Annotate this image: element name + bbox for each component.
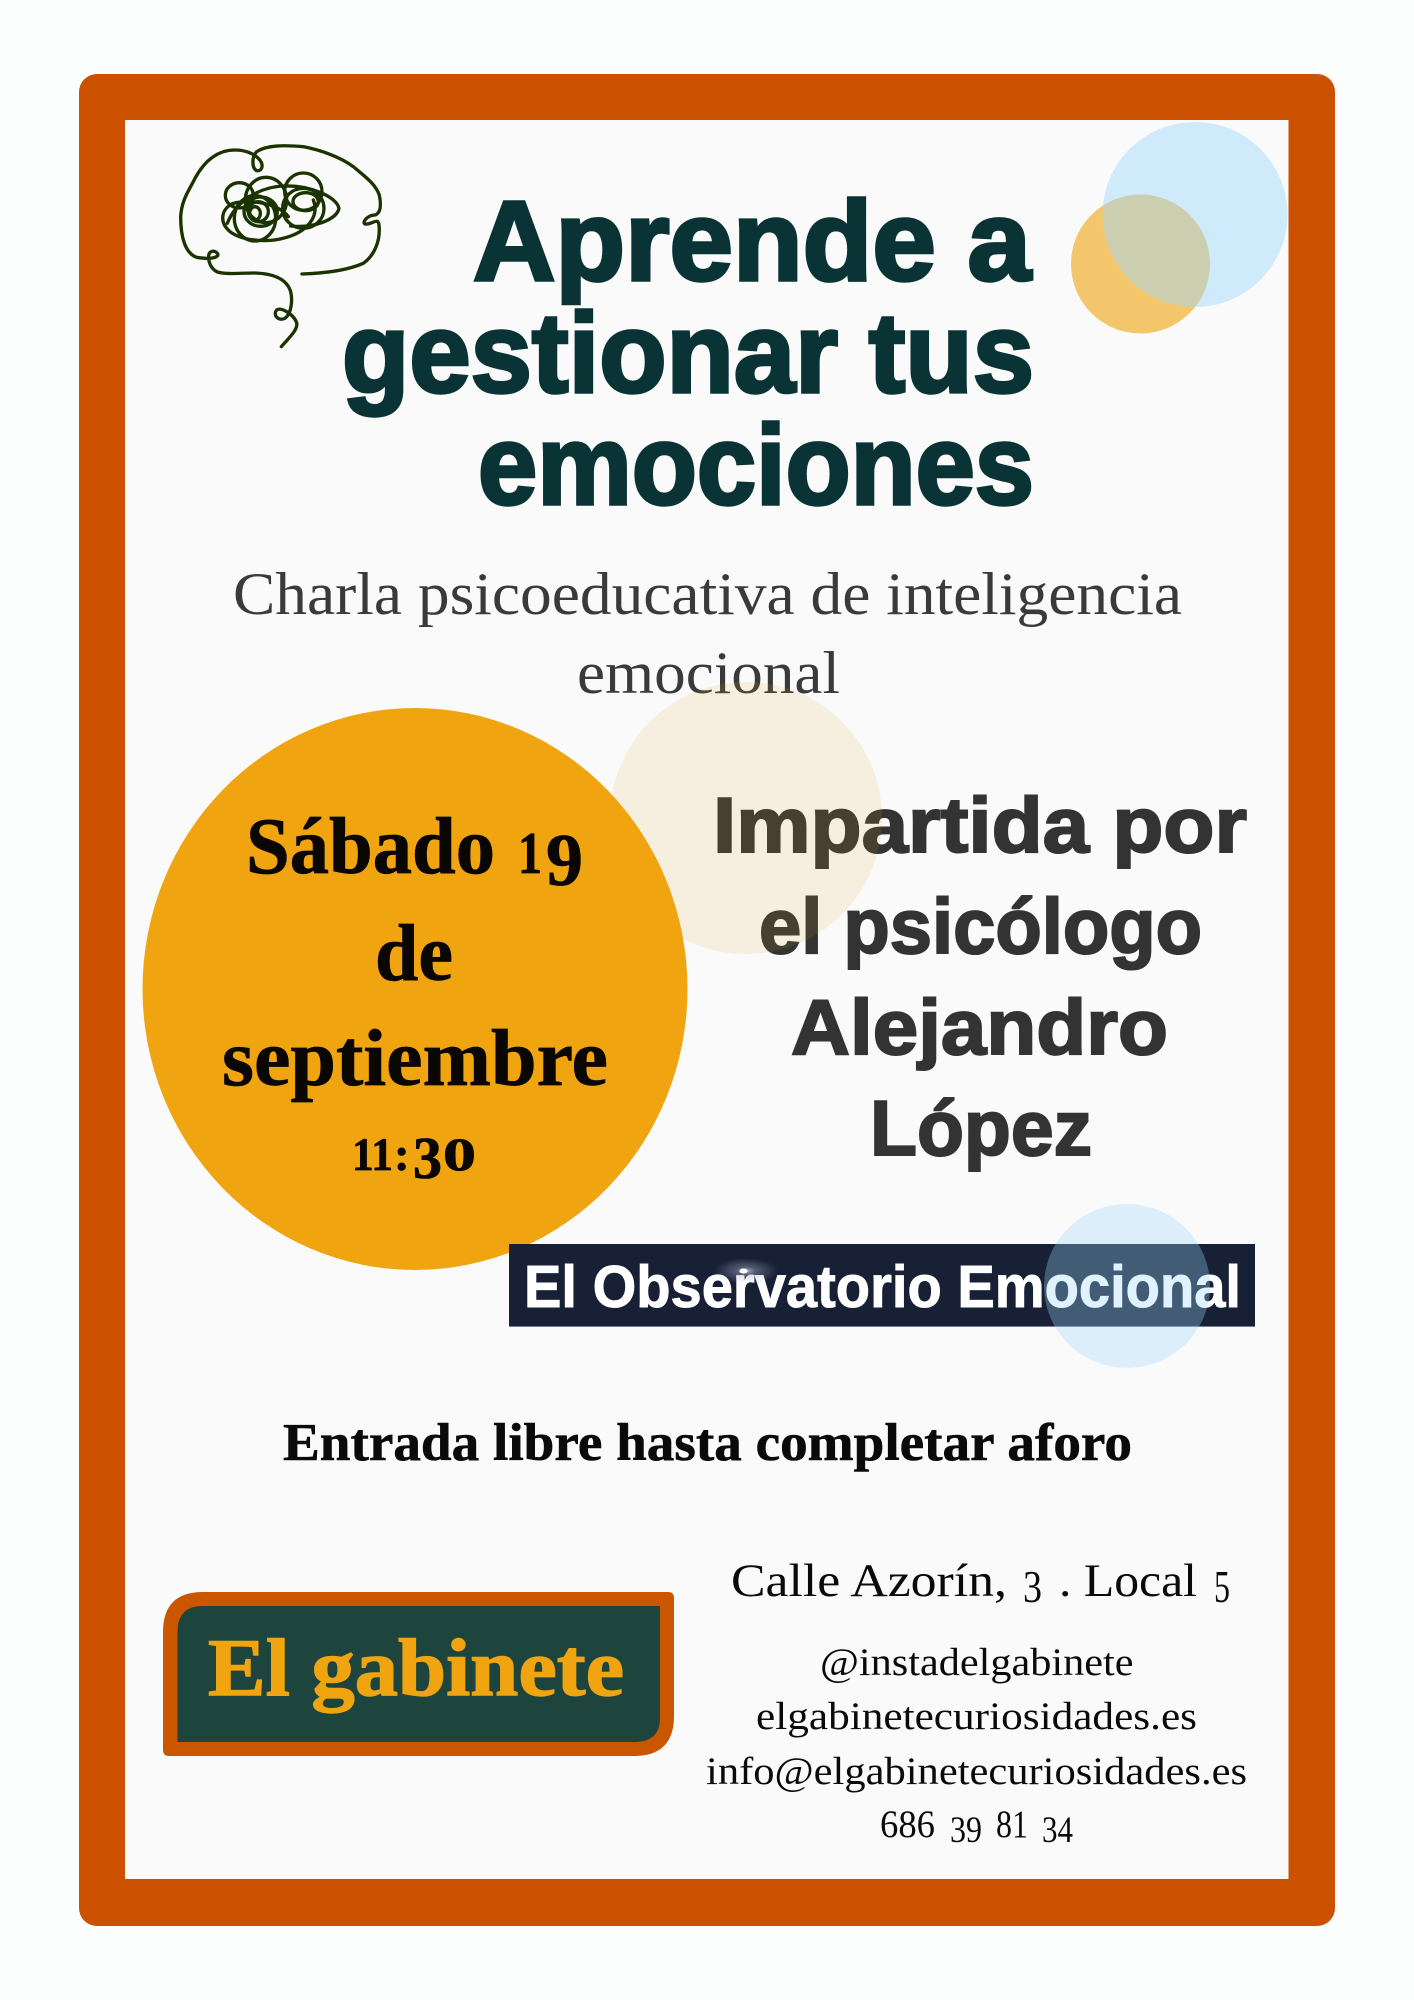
logo: El gabinete: El gabinete	[208, 1622, 624, 1713]
subtitle	[233, 561, 1182, 706]
title: emociones	[478, 402, 1034, 528]
date text: 11	[352, 1129, 393, 1181]
contact details: info@elgabinetecuriosidades.es	[706, 1750, 1247, 1793]
subtitle: Charla psicoeducativa de inteligencia	[233, 561, 1182, 627]
banner: El Observatorio Emocional: El Observatorio Emocional	[524, 1254, 1241, 1320]
contact details: elgabinetecuriosidades.es	[756, 1695, 1197, 1738]
speaker text: Alejandro	[791, 983, 1168, 1071]
contact details	[706, 1641, 1247, 1851]
date text	[222, 803, 608, 1191]
contact details: 81	[996, 1803, 1028, 1846]
title	[342, 178, 1034, 528]
contact details: 39	[950, 1810, 982, 1851]
contact details: 686	[880, 1803, 935, 1846]
title: gestionar tus	[342, 290, 1034, 416]
date text: de	[375, 910, 453, 998]
star glow	[714, 1258, 778, 1284]
decorative beige circle	[610, 682, 882, 954]
subtitle: emocional	[577, 640, 840, 706]
date text: 3	[413, 1125, 442, 1191]
date circle	[142, 708, 688, 1270]
speaker text	[713, 781, 1247, 1172]
date text: septiembre	[222, 1015, 608, 1103]
date text: Sábado	[246, 803, 495, 891]
contact details: @instadelgabinete	[820, 1641, 1134, 1684]
speaker text: López	[870, 1084, 1092, 1172]
address: 5	[1214, 1561, 1230, 1612]
title: Aprende a	[473, 178, 1032, 304]
address: Calle Azorín,	[731, 1555, 1007, 1607]
admission note: Entrada libre hasta completar aforo	[283, 1414, 1132, 1472]
date text: 1	[518, 820, 542, 886]
decorative overlapping circles, top right	[1071, 122, 1288, 334]
date text: 0	[443, 1129, 476, 1181]
contact details: 34	[1042, 1810, 1073, 1851]
date text: :	[394, 1129, 410, 1181]
speaker text: el psicólogo	[759, 882, 1202, 970]
address: 3	[1023, 1561, 1042, 1612]
icon: tangled scribble brain	[181, 146, 380, 347]
speaker text: Impartida por	[713, 781, 1247, 869]
address: . Local	[1059, 1555, 1197, 1607]
address	[731, 1555, 1230, 1612]
decorative blue circle over banner	[1044, 1204, 1210, 1368]
date text: 9	[546, 820, 583, 902]
logo: El gabinete	[163, 1592, 674, 1756]
